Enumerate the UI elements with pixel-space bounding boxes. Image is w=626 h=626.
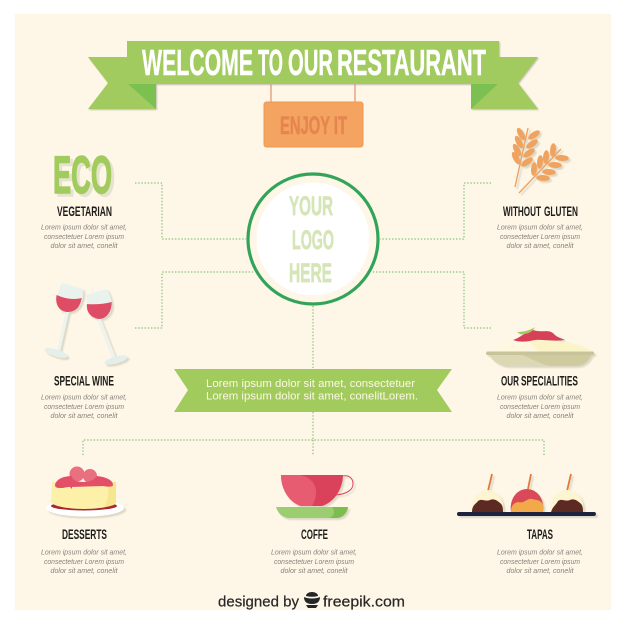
title: RESTAURANT [337,42,486,83]
item: desserts: consectetuer Lorem ipsum [44,557,124,566]
heading: our specialities: SPECIALITIES [521,372,578,388]
item: special wine: dolor sit amet, conelit [50,411,118,420]
item: our specialities: dolor sit amet, conelit [506,411,574,420]
item: special wine [41,283,128,420]
item: vegetarian: dolor sit amet, conelit [50,241,118,250]
footer credit: freepik.com [323,594,405,610]
title ribbon [88,41,538,109]
heading: without gluten: WITHOUT [503,203,541,219]
item: our specialities: Lorem ipsum dolor sit amet, [497,392,583,402]
heading: special wine: WINE [92,372,114,388]
item: coffe [271,475,357,575]
item: our specialities [486,327,594,420]
eco mark: ECO [56,149,115,208]
item: vegetarian: VEGETARIAN [57,203,112,219]
icon: wheat [510,127,569,193]
item: without gluten [497,127,583,250]
item: coffe: consectetuer Lorem ipsum [274,557,354,566]
icon: pasta plate [486,327,594,366]
icon: coffee cup [276,475,353,518]
item: vegetarian: Lorem ipsum dolor sit amet, [41,222,127,232]
item: tapas: consectetuer Lorem ipsum [500,557,580,566]
item: tapas: TAPAS [527,526,553,542]
item: our specialities: consectetuer Lorem ipsum [500,402,580,411]
heading: without gluten: GLUTEN [544,203,578,219]
logo circle: LOGO [292,225,334,255]
item: special wine: Lorem ipsum dolor sit amet, [41,392,127,402]
item: desserts: dolor sit amet, conelit [50,566,118,575]
item: coffe: dolor sit amet, conelit [280,566,348,575]
heading: our specialities: OUR [501,372,519,388]
center banner [174,369,452,412]
item: coffe: Lorem ipsum dolor sit amet, [271,548,357,556]
logo circle: HERE [289,258,332,288]
item: desserts [41,466,127,575]
footer credit: designed by [218,594,300,610]
item: tapas: dolor sit amet, conelit [506,566,574,575]
icon: wine glasses [44,283,128,366]
title [142,42,486,83]
item: tapas [457,474,596,575]
item: special wine: consectetuer Lorem ipsum [44,402,124,411]
center banner: Lorem ipsum dolor sit amet, conelitLorem. [206,390,418,402]
eco mark [53,146,115,208]
sign: enjoy it: ENJOY IT [280,112,347,140]
sign: enjoy it [264,84,363,147]
item: vegetarian [41,146,127,250]
center banner: Lorem ipsum dolor sit amet, consectetuer [206,378,415,390]
item: desserts: Lorem ipsum dolor sit amet, [41,548,127,556]
heading: special wine: SPECIAL [54,372,90,388]
icon: cake [46,466,124,516]
title: OUR [288,42,333,83]
item: desserts: DESSERTS [62,526,107,542]
title: TO [258,42,283,83]
logo circle [248,174,378,304]
connector lines [83,183,544,455]
item: without gluten: consectetuer Lorem ipsum [500,232,580,241]
item: without gluten: Lorem ipsum dolor sit amet, [497,222,583,232]
eco mark: ECO [53,146,112,205]
item: without gluten: dolor sit amet, conelit [506,241,574,250]
title: WELCOME [142,42,253,83]
item: vegetarian: consectetuer Lorem ipsum [44,232,124,241]
heading: our specialities [501,372,578,388]
item: tapas: Lorem ipsum dolor sit amet, [497,548,583,556]
footer credit [218,592,405,610]
logo circle: YOUR [289,191,333,221]
item: coffe: COFFE [301,526,328,542]
icon: tapas tray [457,474,596,516]
